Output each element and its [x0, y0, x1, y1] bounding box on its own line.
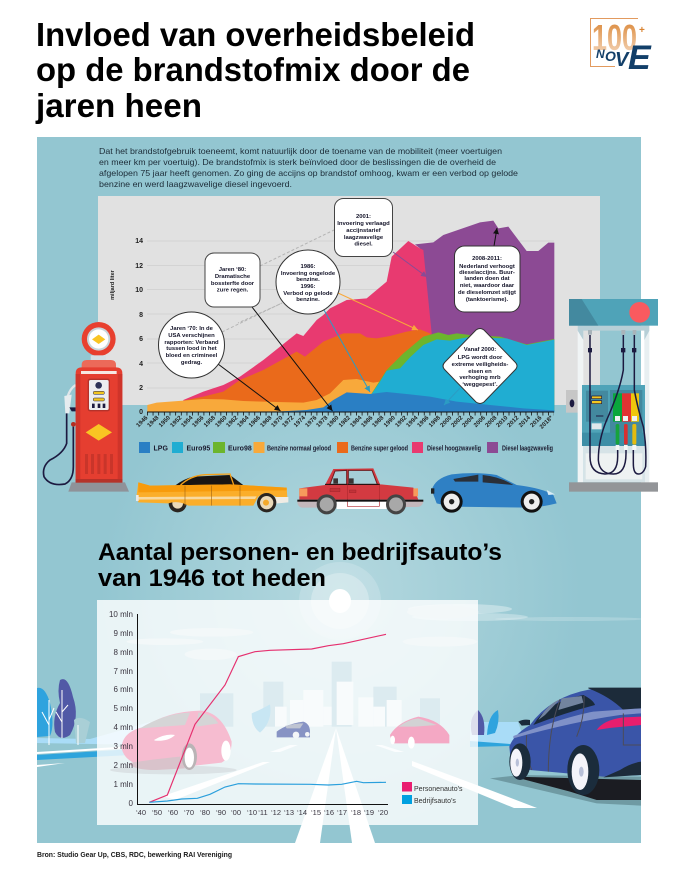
legend: fuel types: Diesel laagzwavelig [502, 446, 553, 452]
chart axes and labels: 2018* [539, 415, 555, 431]
chart axes and labels: 1996 [417, 415, 431, 429]
chart axes and labels: 1956 [192, 415, 206, 429]
chart axes and labels: 1966 [248, 415, 262, 429]
line chart: number of cars: 3 mln [113, 742, 133, 751]
callout: vanaf 2000: ‘weggepest’. [462, 382, 498, 388]
line chart: number of cars: ‘13 [284, 808, 294, 817]
chart axes and labels: 1982 [338, 415, 352, 429]
line chart: number of cars: 9 mln [113, 629, 133, 638]
chart axes and labels: 1976 [305, 415, 319, 429]
right plants [471, 710, 484, 735]
logo: 100+ Nove: + [639, 25, 645, 36]
legend: fuel types: Euro95 [186, 446, 210, 452]
logo: 100+ Nove: 100 [592, 17, 637, 58]
line: personenauto's [149, 634, 386, 802]
chart axes and labels: 2016 [530, 415, 544, 429]
callout: jaren 70: USA verschijnen [168, 333, 215, 339]
chart axes and labels: 2 [139, 385, 143, 392]
icon: red vintage fuel pump [43, 322, 129, 492]
intro text: benzine en werd laagzwavelige diesel ingevoerd. [99, 180, 292, 189]
chart axes and labels: 1988 [372, 415, 386, 429]
line chart: number of cars: ‘17 [337, 808, 347, 817]
icon: modern fuel pump [566, 299, 658, 492]
line chart: number of cars: ‘10 [247, 808, 257, 817]
area: diesel laagzwavelig [415, 221, 554, 412]
chart axes and labels: 2004 [462, 415, 476, 429]
callout: jaren 80: zure regen. [217, 288, 249, 294]
chart axes and labels: 4 [139, 361, 143, 368]
line chart: number of cars: ‘16 [324, 808, 334, 817]
callout: 2001: Invoering verlaagd [337, 221, 390, 227]
chart axes and labels: 1950 [158, 415, 172, 429]
line chart: number of cars: ‘90 [216, 808, 226, 817]
callout: vanaf 2000: LPG wordt door [458, 355, 503, 361]
chart axes and labels: 1964 [237, 415, 251, 429]
chart axes and labels: 8 [139, 312, 143, 319]
callout: 2008-2011: niet, waardoor daar [460, 283, 515, 289]
callout: jaren 80 [205, 253, 260, 307]
callout: jaren 70: gedrag. [181, 360, 202, 366]
callout: 1986 en 1996: Invoering ongelode [281, 271, 336, 277]
callout: vanaf 2000: Vanaf 2000: [464, 347, 496, 353]
title: op de brandstofmix door de [36, 51, 470, 88]
line: bedrijfsauto's [149, 781, 386, 802]
chart axes and labels: 1958 [203, 415, 217, 429]
line chart: number of cars: 5 mln [113, 704, 133, 713]
chart axes and labels: 1990 [383, 415, 397, 429]
road markings [295, 728, 336, 843]
line chart: number of cars: ‘14 [297, 808, 307, 817]
callout: vanaf 2000: verhoging mrb [459, 375, 501, 381]
chart axes and labels: 1998 [428, 415, 442, 429]
callout: 2008-2011: landen doen dat [464, 276, 510, 282]
chart axes and labels: 1978 [316, 415, 330, 429]
panel: fuel mix chart background [98, 196, 600, 405]
line chart: number of cars: 2 mln [113, 761, 133, 770]
illustration: faded traffic and city behind chart [110, 605, 478, 774]
legend: fuel types [139, 442, 553, 453]
callout: 2008-2011: (tanktoerisme). [466, 297, 508, 303]
line chart: number of cars: ‘70 [184, 808, 194, 817]
callout: 2008-2011: dieselaccijns. Buur- [459, 270, 515, 276]
callout: 2008-2011: Nederland verhoogt [459, 264, 515, 270]
callout: 2008-2011: de dieselomzet stijgt [458, 290, 516, 296]
legend: fuel types: Benzine normaal gelood [267, 446, 331, 452]
area: benzine normaal gelood [147, 379, 380, 412]
chart axes and labels: 2002 [451, 415, 465, 429]
intro text: afgelopen 75 jaar heeft genomen. Zo ging de accijns op brandstof omhoog, kwam er een verbod op gelode [99, 169, 518, 178]
right road bands [478, 722, 521, 744]
title [35, 16, 475, 124]
logo: 100+ Nove [590, 17, 652, 77]
line chart: number of cars: 8 mln [113, 648, 133, 657]
chart axes and labels: 2010 [496, 415, 510, 429]
intro text: Dat het brandstofgebruik toeneemt, komt natuurlijk door de toename van de mobiliteit (meer voertuigen [99, 147, 502, 156]
area: benzine super gelood [183, 329, 430, 412]
line chart: number of cars: ‘15 [311, 808, 321, 817]
chart axes and labels: 2014 [518, 415, 532, 429]
legend: vehicle types: Personenauto’s [414, 786, 463, 793]
heading: aantal personen- en bedrijfsauto's [98, 539, 502, 592]
chart axes and labels: 2008 [485, 415, 499, 429]
chart axes and labels [110, 238, 555, 431]
chart axes and labels: 1970 [271, 415, 285, 429]
legend: vehicle types: Bedrijfsauto’s [414, 798, 456, 805]
area: LPG [230, 392, 554, 412]
chart axes and labels: 2000 [440, 415, 454, 429]
chart axes and labels: 2012 [507, 415, 521, 429]
icon: red sedan car [297, 468, 423, 514]
callout: jaren 70: Jaren ‘70: In de [170, 326, 214, 332]
callout: vanaf 2000: eisen en [468, 369, 492, 375]
heading: aantal personen- en bedrijfsauto's: van 1946 tot heden [98, 565, 326, 592]
stacked area chart: fuel mix [147, 221, 554, 412]
callout: 2001: diesel. [354, 242, 373, 248]
area: diesel hoogzwavelig [183, 241, 432, 412]
chart axes and labels: 6 [139, 336, 143, 343]
chart axes and labels: 10 [135, 287, 143, 294]
callout: 2008-2011 [454, 246, 520, 312]
callout: vanaf 2000 [443, 328, 517, 404]
intro text [99, 147, 518, 189]
callout: jaren 80: Dramatische [215, 274, 251, 280]
chart annotation lines and arrows [218, 228, 497, 411]
chart axes and labels: 0 [139, 409, 143, 416]
callout: 1986 en 1996 [276, 250, 340, 314]
callout: jaren 70: bloed en crimineel [166, 353, 218, 359]
illustration: road scene background [37, 562, 645, 843]
line chart: number of cars: 7 mln [113, 667, 133, 676]
line chart: number of cars: ‘40 [136, 808, 146, 817]
line chart: number of cars [109, 610, 388, 817]
line chart: number of cars: ‘60 [168, 808, 178, 817]
callout: jaren 70 [158, 312, 224, 378]
chart axes and labels: 2006 [473, 415, 487, 429]
line chart: number of cars: ‘18 [351, 808, 361, 817]
logo: 100+ Nove: E [628, 39, 652, 77]
line chart: number of cars: ‘50 [152, 808, 162, 817]
chart axes and labels: miljard liter [110, 269, 116, 300]
background panel [37, 137, 641, 843]
left road bands [37, 737, 97, 744]
logo: 100+ Nove: N [596, 47, 605, 61]
chart axes and labels: 1968 [260, 415, 274, 429]
chart axes and labels: 1974 [293, 415, 307, 429]
line chart: number of cars: 0 [129, 799, 134, 808]
source note: Bron: Studio Gear Up, CBS, RDC, bewerking RAI Vereniging [37, 850, 232, 859]
callout: 2001: accijnstarief [346, 228, 381, 234]
callout: 1986 en 1996: Verbod op gelode [283, 291, 333, 297]
callout: 2001 [334, 198, 392, 256]
icon: blue sports car [431, 473, 557, 513]
line chart: number of cars: 4 mln [113, 723, 133, 732]
heading: aantal personen- en bedrijfsauto's: Aantal personen- en bedrijfsauto’s [98, 539, 502, 566]
legend: fuel types: Diesel hoogzwavelig [427, 446, 481, 452]
chart axes and labels: 1972 [282, 415, 296, 429]
panel: vehicle chart backdrop [97, 600, 478, 825]
callout: jaren 70: tussen lood in het [166, 346, 217, 352]
chart axes and labels: 1994 [406, 415, 420, 429]
callout: 1986 en 1996: benzine. [296, 277, 320, 283]
chart axes and labels: 1986 [361, 415, 375, 429]
line chart: number of cars: ‘20 [378, 808, 388, 817]
line chart: number of cars: ‘00 [231, 808, 241, 817]
callout: 1986 en 1996: benzine. [296, 297, 320, 303]
title: jaren heen [35, 87, 202, 124]
illustration: large blue car [490, 688, 641, 806]
line chart: number of cars: 1 mln [113, 780, 133, 789]
line chart: number of cars: ‘11 [258, 808, 268, 817]
chart axes and labels: 1984 [350, 415, 364, 429]
logo: 100+ Nove: V [615, 49, 630, 71]
left plants [37, 688, 52, 737]
area: euro98 [372, 332, 554, 412]
intro text: en meer km per voertuig). De brandstofmix is sterk beïnvloed door de beslissingen die de overheid de [99, 158, 496, 167]
line chart: number of cars: 10 mln [109, 610, 133, 619]
callout: jaren 80: bossterfte door [211, 281, 255, 287]
callout: 2001: laagzwavelige [344, 235, 384, 241]
legend: vehicle types [402, 782, 463, 805]
chart axes and labels: 1992 [395, 415, 409, 429]
chart axes and labels: 1948 [147, 415, 161, 429]
callout: 2008-2011: 2008-2011: [472, 256, 502, 262]
legend: fuel types: Euro98 [228, 446, 252, 452]
chart axes and labels: 1954 [181, 415, 195, 429]
chart axes and labels: 1946 [136, 415, 150, 429]
callout: 1986 en 1996: 1986: [300, 264, 316, 270]
chart axes and labels: 1962 [226, 415, 240, 429]
line chart: number of cars: ‘80 [200, 808, 210, 817]
chart axes and labels: 14 [135, 238, 143, 245]
callout: jaren 70: rapporten: Verband [164, 340, 219, 346]
callout: vanaf 2000: extreme veiligheids- [452, 362, 508, 368]
chart axes and labels: 1960 [215, 415, 229, 429]
line chart: number of cars: ‘12 [271, 808, 281, 817]
chart axes and labels: 12 [135, 263, 143, 270]
callout: 1986 en 1996: 1996: [300, 284, 316, 290]
callout: jaren 80: Jaren ‘80: [219, 267, 246, 273]
line chart: number of cars: ‘19 [364, 808, 374, 817]
logo: 100+ Nove: O [605, 48, 616, 64]
icon: yellow vintage car [136, 474, 288, 512]
legend: fuel types: Benzine super gelood [351, 446, 408, 452]
chart axes and labels: 1952 [170, 415, 184, 429]
line chart: number of cars: 6 mln [113, 685, 133, 694]
legend: fuel types: LPG [154, 446, 168, 452]
chart axes and labels: 1980 [327, 415, 341, 429]
area: euro95 [372, 337, 554, 412]
title: Invloed van overheidsbeleid [36, 16, 475, 53]
callout: 2001: 2001: [356, 214, 371, 220]
